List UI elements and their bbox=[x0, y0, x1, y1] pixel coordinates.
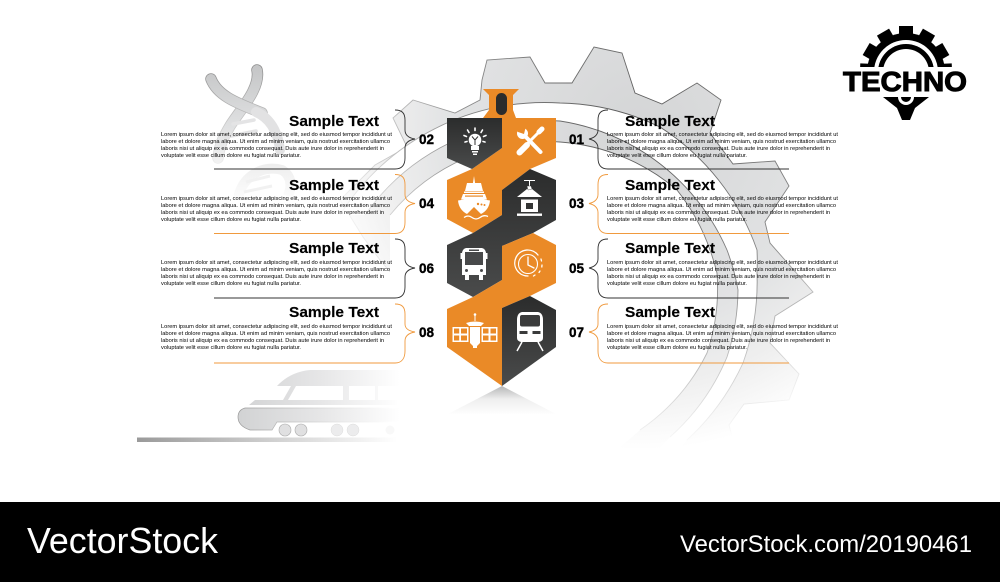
body 03: laboris nisi ut aliquip ex ea commodo consequat. Duis aute irure dolor in reprehenderit in bbox=[607, 210, 830, 216]
body 04: laboris nisi ut aliquip ex ea commodo consequat. Duis aute irure dolor in reprehenderit in bbox=[161, 210, 384, 216]
body 07: laboris nisi ut aliquip ex ea commodo consequat. Duis aute irure dolor in reprehenderit in bbox=[607, 338, 830, 344]
body 07: Lorem ipsum dolor sit amet, consectetur adipiscing elit, sed do eiusmod tempor incididunt ut bbox=[607, 324, 838, 330]
train watermark bbox=[137, 370, 400, 442]
heading 01: Sample Text bbox=[625, 113, 715, 130]
footer url: VectorStock.com/20190461 bbox=[680, 531, 972, 558]
heading 02: Sample Text bbox=[289, 113, 379, 130]
body 07 bbox=[607, 324, 838, 351]
body 07: labore et dolore magna aliqua. Ut enim ad minim veniam, quis nostrud exercitation ullamco bbox=[607, 331, 836, 337]
dark hexagon 02 bbox=[447, 118, 502, 169]
icon: wrench and screwdriver bbox=[516, 126, 542, 152]
body 06: laboris nisi ut aliquip ex ea commodo consequat. Duis aute irure dolor in reprehenderit in bbox=[161, 274, 384, 280]
number 03: 03 bbox=[569, 196, 585, 211]
icon: light bulb bbox=[464, 128, 486, 155]
row 01 right bbox=[569, 110, 838, 169]
body 06: voluptate velit esse cillum dolore eu fugiat nulla pariatur. bbox=[161, 281, 301, 287]
body 01 bbox=[607, 132, 838, 159]
brace 03 bbox=[589, 174, 789, 234]
body 08: voluptate velit esse cillum dolore eu fugiat nulla pariatur. bbox=[161, 345, 301, 351]
body 08: labore et dolore magna aliqua. Ut enim ad minim veniam, quis nostrud exercitation ullamco bbox=[161, 331, 390, 337]
hexagon shadow bbox=[446, 386, 558, 415]
icon: clock bbox=[515, 250, 542, 276]
body 03 bbox=[607, 196, 838, 223]
heading 07: Sample Text bbox=[625, 304, 715, 321]
body 06 bbox=[161, 260, 392, 287]
icon: crane and station bbox=[517, 180, 542, 216]
footer brand: VectorStock bbox=[27, 520, 219, 561]
brace 01 bbox=[589, 110, 789, 169]
body 04: Lorem ipsum dolor sit amet, consectetur adipiscing elit, sed do eiusmod tempor incididunt ut bbox=[161, 196, 392, 202]
row 02 left bbox=[161, 110, 434, 169]
body 03: voluptate velit esse cillum dolore eu fugiat nulla pariatur. bbox=[607, 217, 747, 223]
row 07 right bbox=[569, 304, 838, 363]
body 03: labore et dolore magna aliqua. Ut enim ad minim veniam, quis nostrud exercitation ullamco bbox=[607, 203, 836, 209]
body 03: Lorem ipsum dolor sit amet, consectetur adipiscing elit, sed do eiusmod tempor incididunt ut bbox=[607, 196, 838, 202]
body 08: laboris nisi ut aliquip ex ea commodo consequat. Duis aute irure dolor in reprehenderit in bbox=[161, 338, 384, 344]
number 07: 07 bbox=[569, 325, 584, 340]
body 05: laboris nisi ut aliquip ex ea commodo consequat. Duis aute irure dolor in reprehenderit in bbox=[607, 274, 830, 280]
body 05: labore et dolore magna aliqua. Ut enim ad minim veniam, quis nostrud exercitation ullamco bbox=[607, 267, 836, 273]
body 01: laboris nisi ut aliquip ex ea commodo consequat. Duis aute irure dolor in reprehenderit in bbox=[607, 146, 830, 152]
body 05 bbox=[607, 260, 838, 287]
orange ribbon upper bbox=[447, 118, 556, 233]
body 02: labore et dolore magna aliqua. Ut enim ad minim veniam, quis nostrud exercitation ullamco bbox=[161, 139, 390, 145]
heading 04: Sample Text bbox=[289, 177, 379, 194]
number 06: 06 bbox=[419, 261, 435, 276]
body 06: Lorem ipsum dolor sit amet, consectetur adipiscing elit, sed do eiusmod tempor incididunt ut bbox=[161, 260, 392, 266]
body 04: voluptate velit esse cillum dolore eu fugiat nulla pariatur. bbox=[161, 217, 301, 223]
footer band bbox=[0, 502, 1000, 582]
body 05: voluptate velit esse cillum dolore eu fugiat nulla pariatur. bbox=[607, 281, 747, 287]
body 01: voluptate velit esse cillum dolore eu fugiat nulla pariatur. bbox=[607, 153, 747, 159]
body 02: voluptate velit esse cillum dolore eu fugiat nulla pariatur. bbox=[161, 153, 301, 159]
techno logo bbox=[843, 26, 967, 120]
body 04: labore et dolore magna aliqua. Ut enim ad minim veniam, quis nostrud exercitation ullamco bbox=[161, 203, 390, 209]
icon: train front bbox=[517, 312, 543, 351]
number 08: 08 bbox=[419, 325, 435, 340]
body 05: Lorem ipsum dolor sit amet, consectetur adipiscing elit, sed do eiusmod tempor incididunt ut bbox=[607, 260, 838, 266]
number 05: 05 bbox=[569, 261, 585, 276]
heading 06: Sample Text bbox=[289, 240, 379, 257]
body 08: Lorem ipsum dolor sit amet, consectetur adipiscing elit, sed do eiusmod tempor incididunt ut bbox=[161, 324, 392, 330]
DNA helix watermark bbox=[211, 70, 290, 200]
body 08 bbox=[161, 324, 392, 351]
brace 07 bbox=[589, 304, 789, 363]
row 03 right bbox=[569, 174, 838, 234]
number 04: 04 bbox=[419, 196, 435, 211]
body 02: laboris nisi ut aliquip ex ea commodo consequat. Duis aute irure dolor in reprehenderit in bbox=[161, 146, 384, 152]
row 05 right bbox=[569, 239, 838, 298]
brace 05 bbox=[589, 239, 789, 298]
icon: bus bbox=[460, 248, 488, 280]
brace 06 bbox=[214, 239, 415, 298]
brace 04 bbox=[214, 174, 415, 234]
orange ribbon lower bbox=[447, 233, 556, 386]
background gear bbox=[340, 47, 813, 490]
dark hexagon 07 bbox=[502, 296, 556, 386]
icon: satellite bbox=[452, 313, 498, 348]
heading 08: Sample Text bbox=[289, 304, 379, 321]
number 01: 01 bbox=[569, 132, 585, 147]
heading 05: Sample Text bbox=[625, 240, 715, 257]
number 02: 02 bbox=[419, 132, 434, 147]
brace 08 bbox=[214, 304, 415, 363]
row 06 left bbox=[161, 239, 435, 298]
top connector bbox=[483, 89, 519, 118]
body 02 bbox=[161, 132, 392, 159]
icon: ship bbox=[458, 176, 490, 219]
body 04 bbox=[161, 196, 392, 223]
row 08 left bbox=[161, 304, 435, 363]
body 02: Lorem ipsum dolor sit amet, consectetur adipiscing elit, sed do eiusmod tempor incididunt ut bbox=[161, 132, 392, 138]
body 01: Lorem ipsum dolor sit amet, consectetur adipiscing elit, sed do eiusmod tempor incididunt ut bbox=[607, 132, 838, 138]
body 07: voluptate velit esse cillum dolore eu fugiat nulla pariatur. bbox=[607, 345, 747, 351]
body 01: labore et dolore magna aliqua. Ut enim ad minim veniam, quis nostrud exercitation ullamco bbox=[607, 139, 836, 145]
heading 03: Sample Text bbox=[625, 177, 715, 194]
brace 02 bbox=[214, 110, 415, 169]
dark ribbon middle bbox=[447, 169, 556, 297]
body 06: labore et dolore magna aliqua. Ut enim ad minim veniam, quis nostrud exercitation ullamco bbox=[161, 267, 390, 273]
techno logo: TECHNO bbox=[843, 66, 967, 97]
row 04 left bbox=[161, 174, 435, 234]
